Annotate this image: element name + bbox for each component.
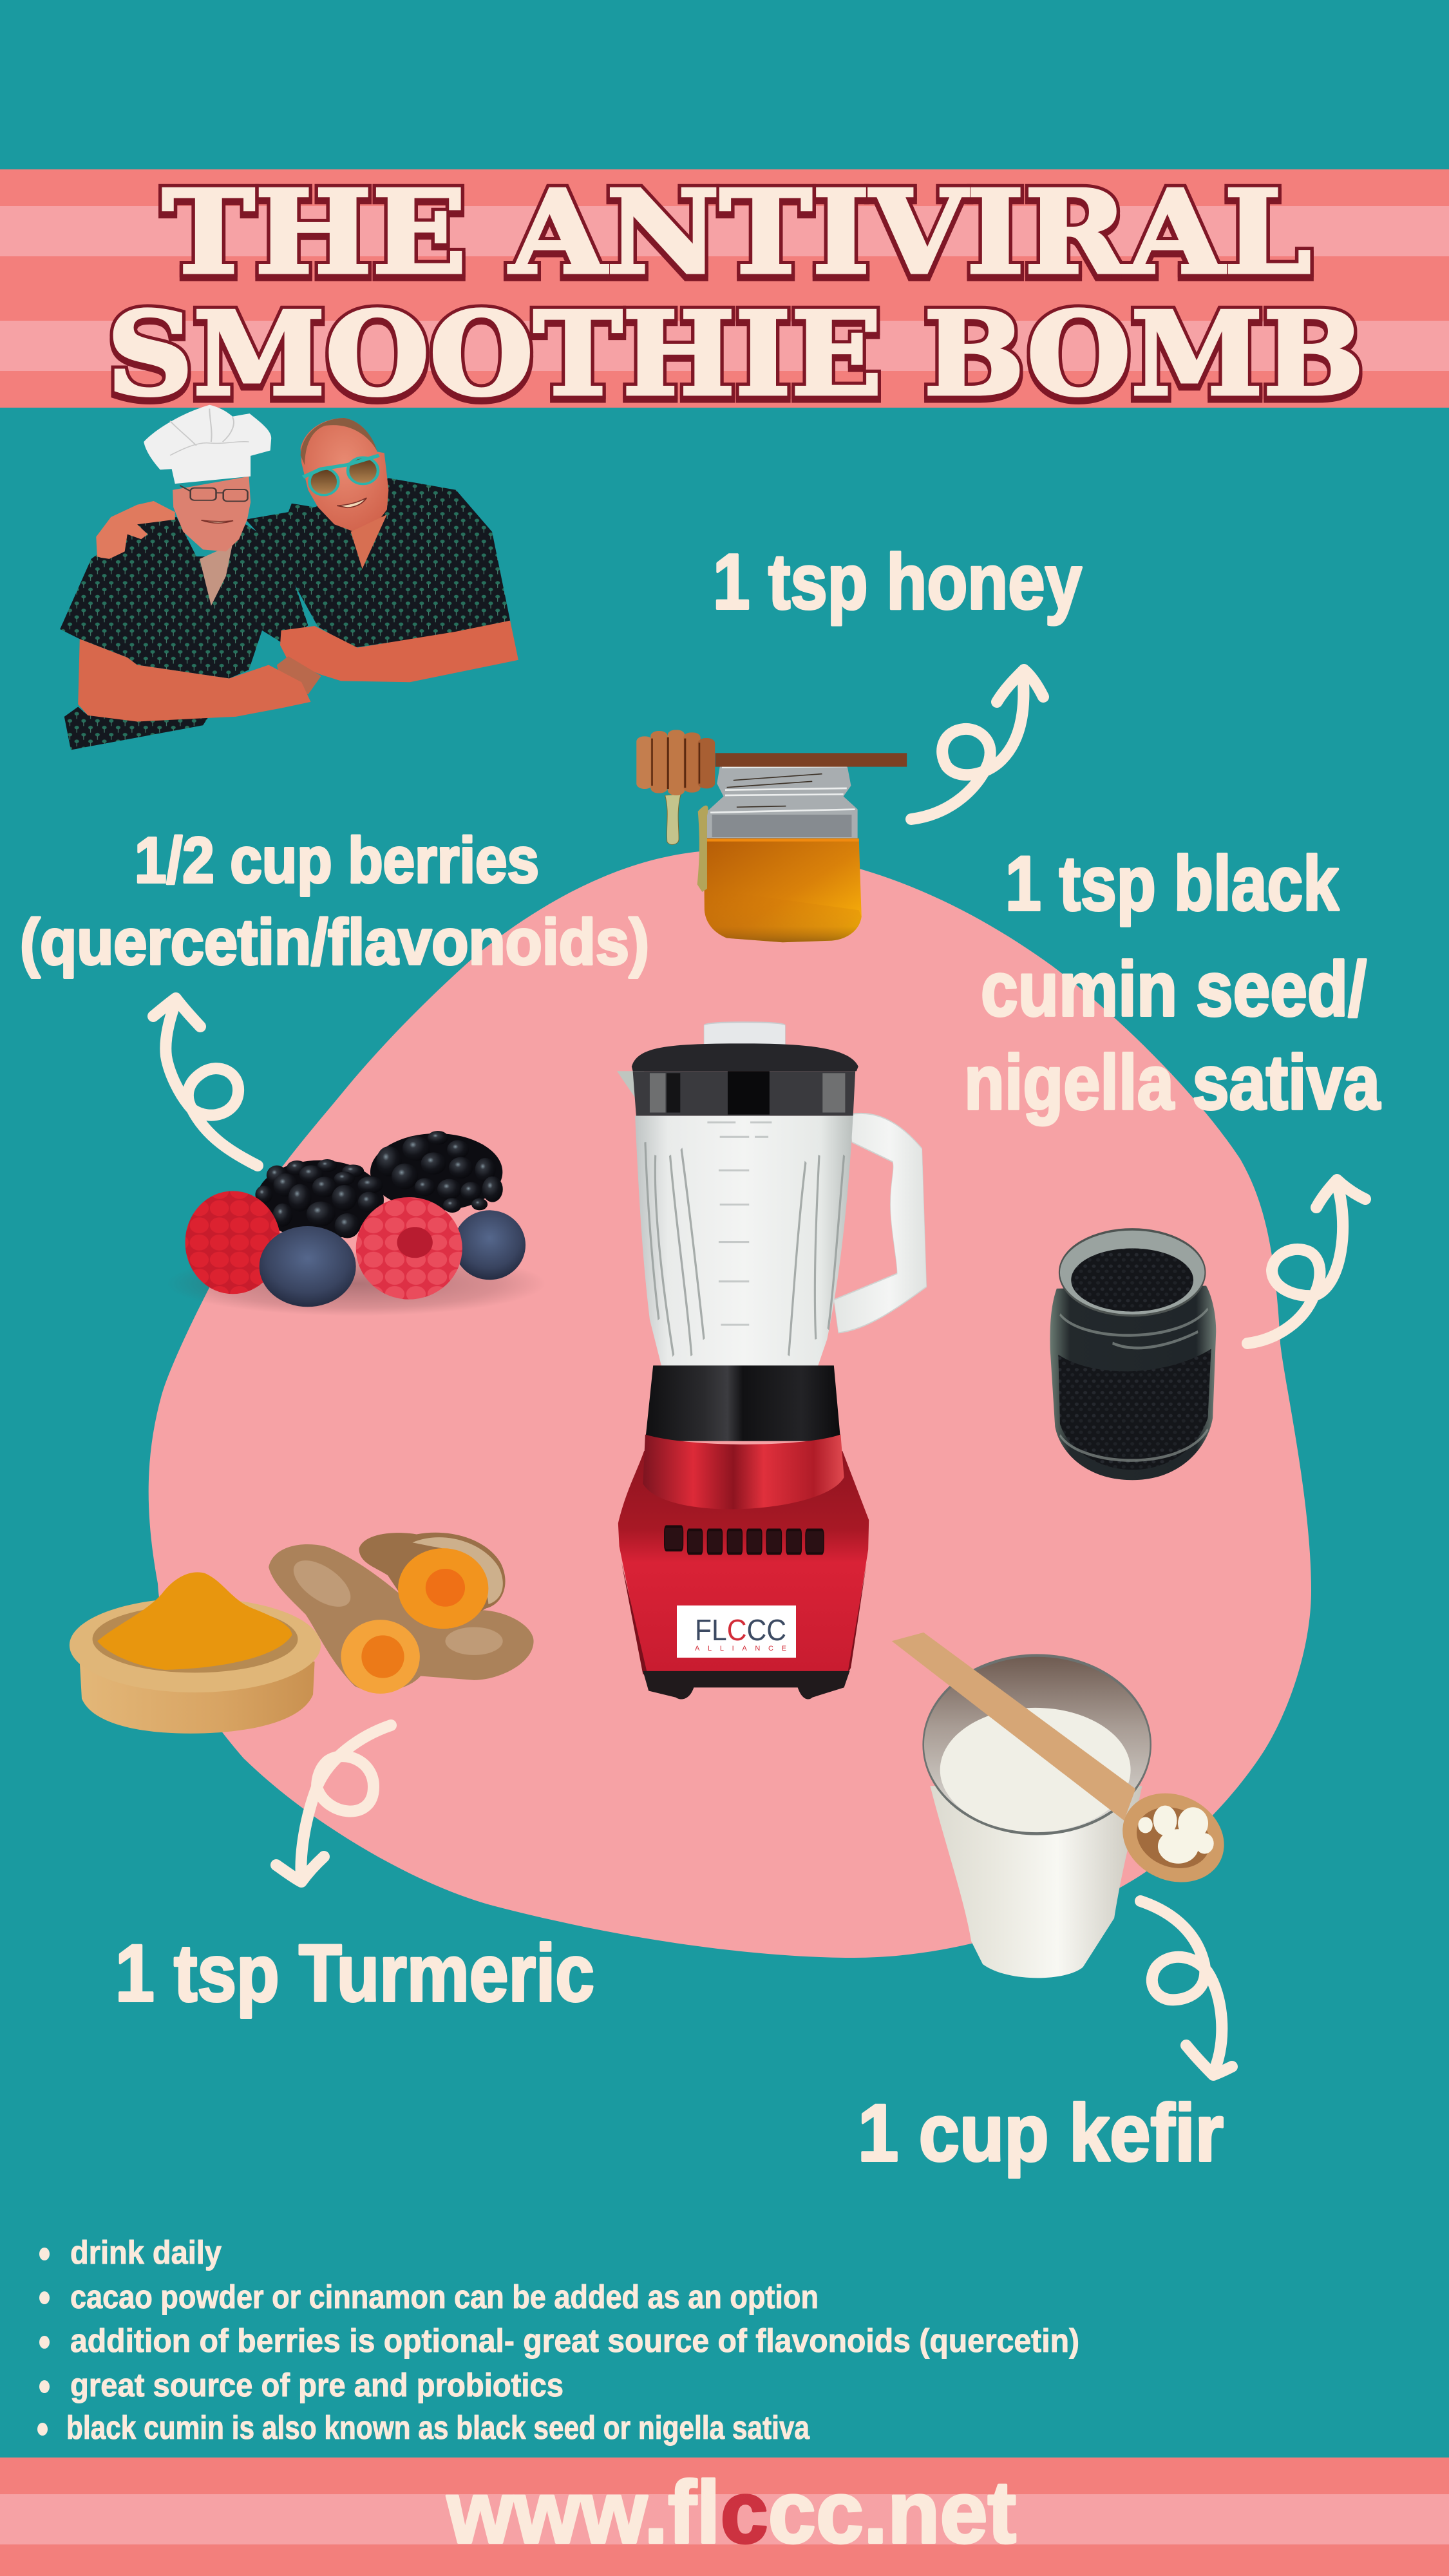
photo: honey jar with dipper bbox=[636, 730, 907, 942]
left man lower shirt bbox=[64, 707, 208, 750]
footer website url: www.flccc.net bbox=[446, 2463, 1016, 2562]
bowl inner bbox=[93, 1605, 298, 1672]
jar flutes bbox=[645, 1142, 844, 1356]
right man V neck bbox=[351, 515, 387, 569]
wooden bowl base bbox=[80, 1662, 315, 1734]
left man head bbox=[173, 477, 251, 551]
left man smile bbox=[202, 520, 233, 523]
honey surface line bbox=[705, 839, 859, 842]
seeds in jar body bbox=[1058, 1349, 1211, 1470]
berries shadow bbox=[166, 1251, 545, 1316]
label: black cumin seed: nigella sativa bbox=[964, 1039, 1381, 1126]
chef hat fold lines bbox=[170, 408, 249, 455]
left man open collar bbox=[200, 544, 232, 606]
photo: two doctors with chef hat and sunglasses bbox=[60, 405, 518, 750]
right man hair bbox=[301, 418, 377, 465]
arrow: black cumin bbox=[1247, 1180, 1365, 1343]
honey drip bbox=[665, 794, 681, 844]
label: 1 cup kefir: 1 cup kefir bbox=[858, 2088, 1224, 2178]
feet bbox=[643, 1671, 849, 1700]
blackberry left bbox=[255, 1159, 384, 1240]
kefir glass body bbox=[930, 1786, 1142, 1978]
turmeric root long bbox=[269, 1544, 534, 1691]
right man head bbox=[301, 418, 388, 532]
title: SMOOTHIE BOMB bbox=[107, 287, 1364, 421]
title: THE ANTIVIRAL bbox=[162, 165, 1311, 299]
photo: turmeric powder and roots bbox=[70, 1533, 534, 1734]
blender lid bbox=[632, 1043, 858, 1071]
blender collar bbox=[645, 1365, 840, 1441]
FLCCC logo plate: FLCCC bbox=[695, 1613, 786, 1647]
dipper head bbox=[636, 730, 715, 795]
notes bullet list: drink daily bbox=[70, 2234, 222, 2271]
blender glass jar bbox=[635, 1116, 853, 1369]
jar reflections bbox=[1060, 1309, 1208, 1461]
left man forearm and hand bbox=[78, 639, 310, 721]
right man shirt bbox=[245, 478, 510, 648]
seeds on top bbox=[1071, 1248, 1193, 1312]
turmeric root short bbox=[359, 1533, 506, 1629]
right man forearm and hand bbox=[280, 621, 518, 682]
honey side drip bbox=[697, 806, 708, 892]
notes bullet list: cacao powder or cinnamon can be added as an option bbox=[70, 2278, 819, 2315]
photo: mixed berries bbox=[166, 1131, 545, 1316]
blueberry right bbox=[453, 1210, 526, 1280]
notes bullet list: black cumin is also known as black seed or nigella sativa bbox=[66, 2409, 810, 2446]
label: black cumin seed bbox=[964, 840, 1381, 1126]
teal sunglasses bbox=[303, 455, 379, 495]
label: berries: 1/2 cup berries bbox=[135, 824, 539, 896]
seed jar body bbox=[1050, 1285, 1216, 1480]
FLCCC logo plate: ALLIANCE bbox=[695, 1645, 786, 1653]
label: berries: (quercetin/flavonoids) bbox=[20, 906, 649, 978]
title bbox=[107, 165, 1364, 425]
honey base shade bbox=[704, 889, 862, 942]
footer band stripes bbox=[0, 2458, 1449, 2576]
wooden bowl rim bbox=[70, 1598, 321, 1692]
jar rim bbox=[1059, 1229, 1205, 1316]
hand on shoulder bbox=[96, 501, 175, 559]
milk surface bbox=[940, 1708, 1131, 1832]
label: 1 tsp Turmeric: 1 tsp Turmeric bbox=[115, 1929, 594, 2018]
kefir grains bbox=[1138, 1806, 1214, 1864]
left man shirt bbox=[60, 517, 308, 678]
photo: kefir glass with spoon bbox=[892, 1633, 1227, 1978]
photo: blender bbox=[617, 1022, 927, 1700]
pink blob background bbox=[149, 851, 1311, 1958]
red upper base bbox=[643, 1435, 844, 1509]
honey bbox=[704, 838, 862, 942]
gray band in jar bbox=[712, 815, 851, 837]
photo: black cumin seed jar bbox=[1050, 1229, 1216, 1480]
label: black cumin seed: 1 tsp black bbox=[1005, 840, 1339, 927]
raspberry left bbox=[185, 1191, 281, 1294]
short root pale skin bbox=[412, 1537, 503, 1604]
notes bullet list: great source of pre and probiotics bbox=[70, 2367, 564, 2403]
arrow: honey bbox=[911, 670, 1043, 819]
notes bullet list bbox=[37, 2234, 1079, 2446]
label: 1 tsp honey: 1 tsp honey bbox=[713, 538, 1082, 625]
left man wrist bbox=[277, 656, 321, 694]
wooden spoon handle bbox=[892, 1633, 1135, 1821]
wooden spoon bowl bbox=[1120, 1785, 1227, 1891]
title: THE ANTIVIRAL bbox=[162, 169, 1311, 303]
title banner stripes bbox=[0, 169, 1449, 408]
blueberry front bbox=[260, 1226, 356, 1307]
handle bbox=[834, 1113, 927, 1332]
label: berries bbox=[20, 824, 649, 978]
turmeric powder mound bbox=[97, 1572, 292, 1670]
title: SMOOTHIE BOMB bbox=[107, 287, 1364, 421]
arrow: berries bbox=[153, 998, 258, 1166]
left man glasses bbox=[180, 486, 247, 501]
dipper stick bbox=[715, 753, 907, 767]
FLCCC logo plate bbox=[677, 1605, 796, 1658]
raspberry right bbox=[356, 1197, 462, 1300]
jar neck highlights bbox=[710, 766, 855, 813]
arrow: turmeric bbox=[276, 1725, 391, 1882]
notes bullet list: addition of berries is optional- great source of flavonoids (quercetin) bbox=[70, 2322, 1079, 2359]
jar neck glass bbox=[707, 763, 858, 838]
control buttons bbox=[665, 1526, 824, 1553]
label: black cumin seed: cumin seed/ bbox=[981, 946, 1367, 1032]
measuring marks bbox=[707, 1122, 772, 1325]
right man smile bbox=[337, 498, 366, 507]
spoon hollow bbox=[1135, 1801, 1212, 1874]
long root mottling bbox=[286, 1551, 503, 1655]
title: THE ANTIVIRAL bbox=[162, 165, 1311, 299]
chef hat bbox=[144, 405, 271, 484]
blender jar upper band bbox=[633, 1071, 855, 1116]
long root cut end bbox=[341, 1620, 420, 1694]
glass rim bbox=[923, 1656, 1151, 1833]
arrow: kefir bbox=[1141, 1901, 1232, 2075]
short root cut end bbox=[398, 1548, 488, 1629]
red lower base bbox=[618, 1451, 869, 1674]
base dark side panels bbox=[621, 1563, 867, 1674]
dark band reflections bbox=[650, 1071, 845, 1115]
title: SMOOTHIE BOMB bbox=[107, 290, 1364, 425]
jar pour spout bbox=[617, 1071, 644, 1103]
blackberry right bbox=[370, 1131, 503, 1213]
lid knob bbox=[704, 1022, 785, 1045]
